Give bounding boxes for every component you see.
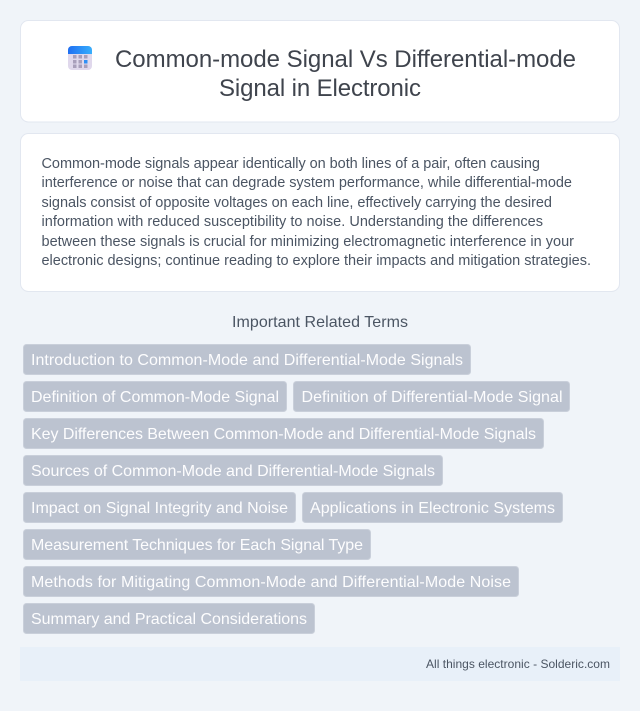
tag: differential-mode definition: Definition of Differential-Mode Signal	[302, 389, 562, 406]
tag: applications: Applications in Electronic Systems	[310, 500, 555, 517]
tag: summary: Summary and Practical Considerations	[31, 611, 307, 628]
heading: related terms: Important Related Terms	[232, 314, 408, 331]
tag: differential-mode definition	[294, 382, 570, 412]
text block: description: interference or noise that can degrade system performance, while differential-mode	[42, 175, 572, 191]
footer: All things electronic - Solderic.com	[426, 657, 610, 671]
text block: description: between these signals is crucial for minimizing electromagnetic interference in your	[42, 234, 574, 250]
text block: description: information with reduced susceptibility to noise. Understanding the differences	[42, 214, 543, 230]
text block: description: Common-mode signals appear identically on both lines of a pair, often causing	[42, 156, 540, 172]
tag: sources	[24, 456, 442, 486]
tag: introduction	[24, 344, 470, 374]
text block: description	[42, 156, 591, 269]
tag: sources: Sources of Common-Mode and Differential-Mode Signals	[31, 463, 435, 480]
text block: description: electronic designs; continue reading to explore their impacts and mitigation strategies.	[42, 253, 591, 269]
icon: calendar grid	[68, 46, 92, 70]
tag: key differences	[24, 418, 544, 448]
tag: key differences: Key Differences Between Common-Mode and Differential-Mode Signals	[31, 426, 536, 443]
tag: measurement: Measurement Techniques for Each Signal Type	[31, 537, 363, 554]
title: Signal in Electronic	[219, 75, 421, 102]
text block: description: signals consist of opposite voltages on each line, effectively carrying the desired	[42, 195, 552, 211]
tag: impact: Impact on Signal Integrity and Noise	[31, 500, 288, 517]
tag: measurement	[24, 530, 370, 560]
panel: title card	[20, 20, 620, 122]
title	[115, 46, 576, 102]
title: Common-mode Signal Vs Differential-mode	[115, 46, 576, 73]
tag: common-mode definition: Definition of Common-Mode Signal	[31, 389, 279, 406]
panel: description card	[20, 134, 620, 292]
tag: mitigation	[24, 566, 518, 596]
tag: introduction: Introduction to Common-Mode and Differential-Mode Signals	[31, 352, 463, 369]
tag: applications	[302, 492, 562, 522]
tag: mitigation: Methods for Mitigating Common-Mode and Differential-Mode Noise	[31, 574, 511, 591]
tag: common-mode definition	[24, 382, 286, 412]
tags: related terms	[24, 344, 570, 634]
tag: impact	[24, 492, 296, 522]
tag: summary	[24, 604, 314, 634]
footer	[20, 647, 620, 681]
